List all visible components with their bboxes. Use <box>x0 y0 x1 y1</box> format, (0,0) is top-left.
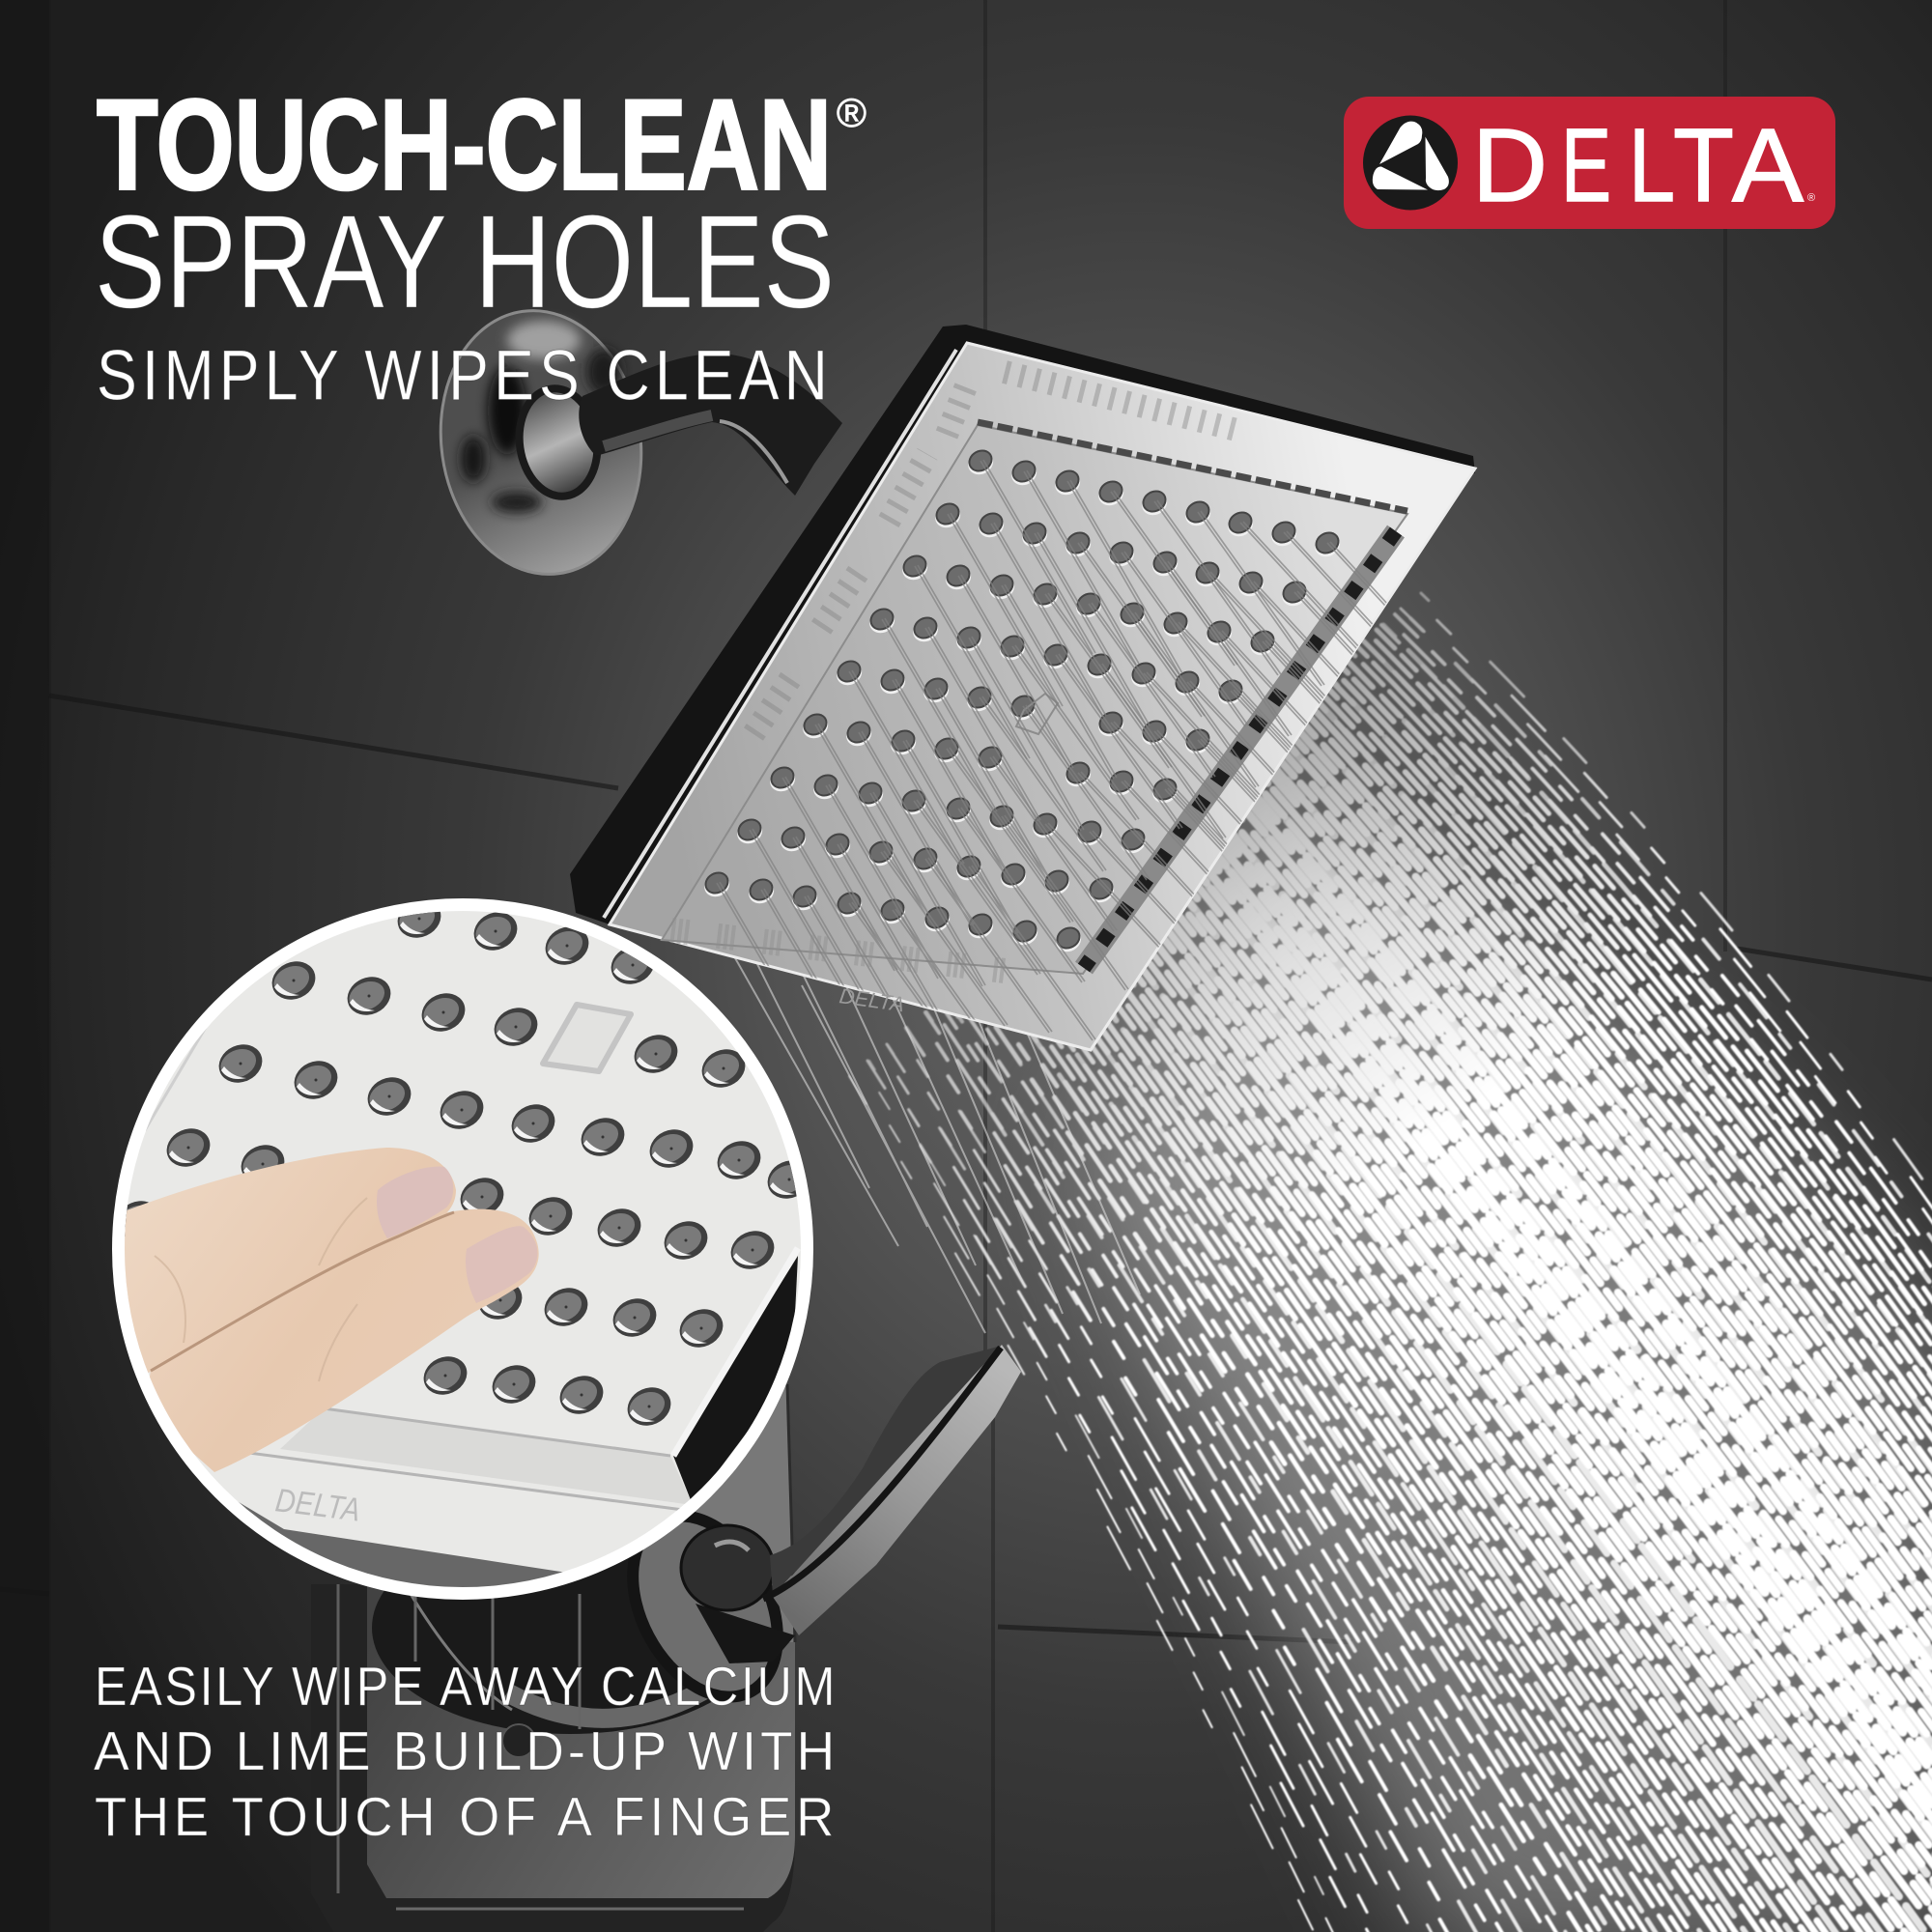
subheading: Simply wipes clean: SIMPLY WIPES CLEAN <box>97 336 833 415</box>
shower valve trim plate and lever handle <box>311 1345 1021 1932</box>
thin water jets below the head <box>717 883 1140 1333</box>
wordmark <box>1472 106 1804 223</box>
body text: description: THE TOUCH OF A FINGER <box>95 1786 838 1848</box>
wordmark: T <box>1673 106 1734 223</box>
wordmark: L <box>1629 106 1675 223</box>
heading: Spray Holes: SPRAY HOLES <box>95 188 835 336</box>
base streak layer <box>849 609 1932 1932</box>
flange <box>424 298 658 587</box>
upper fingernail <box>377 1166 453 1238</box>
registered mark: ® <box>1807 192 1815 204</box>
hub ring <box>604 1492 807 1721</box>
third spray layer <box>863 598 1932 1932</box>
water lines across the face <box>717 460 1387 1041</box>
upper finger <box>97 1148 456 1391</box>
panel top wall <box>978 422 1407 511</box>
second spray layer <box>856 603 1932 1932</box>
spray streaks <box>849 593 1932 1932</box>
logo badge <box>543 1005 631 1071</box>
chrome face close-up <box>112 898 813 1600</box>
rain shower head <box>570 325 1475 1090</box>
small logo mark on panel <box>1016 694 1058 734</box>
lever top face <box>770 1346 1001 1596</box>
title: Touch-Clean: TOUCH-CLEAN <box>97 73 832 216</box>
icon: delta emblem <box>1363 116 1458 211</box>
registered mark: ® <box>837 90 867 135</box>
body text: description: EASILY WIPE AWAY CALCIUM <box>95 1656 838 1718</box>
body text: description <box>94 1656 838 1848</box>
inset spray holes <box>110 893 817 1433</box>
lower finger <box>145 1209 539 1472</box>
hub base <box>696 1604 795 1663</box>
white ring <box>112 898 813 1600</box>
water spray <box>717 593 1932 1932</box>
bright water line edges <box>719 460 1387 1039</box>
logo: Delta <box>1344 97 1835 229</box>
mottled reflection on rim <box>753 372 1236 734</box>
hub ball <box>681 1525 774 1610</box>
grey water line shadows <box>717 460 1387 1041</box>
arm <box>579 354 842 496</box>
arm base ring <box>513 384 604 501</box>
wordmark: E <box>1561 106 1611 223</box>
arm lower reflection <box>604 415 712 446</box>
wall seen at bottom <box>238 1501 563 1587</box>
callout: inset close-up circle <box>97 893 817 1642</box>
flange reflections <box>461 321 621 513</box>
recessed spray panel <box>662 425 1407 974</box>
crease between fingers <box>151 1212 454 1371</box>
wordmark: A <box>1732 106 1804 223</box>
lever light face <box>773 1345 1021 1635</box>
screw <box>502 1724 535 1757</box>
DELTA engraving on head: DELTA <box>838 983 906 1016</box>
valve body <box>372 1521 768 1734</box>
spray pattern band on bottom of panel <box>671 930 1005 971</box>
dark reflections in wall <box>1084 531 1396 968</box>
lower fingernail <box>466 1226 537 1303</box>
fourth spray layer <box>869 593 1932 1932</box>
dark side of head <box>673 1256 798 1505</box>
shower arm and wall flange <box>424 298 842 587</box>
DELTA engraving: DELTA <box>273 1482 362 1529</box>
body text: description: AND LIME BUILD-UP WITH <box>94 1720 838 1782</box>
panel reflective wall <box>1084 531 1396 968</box>
spray holes grid <box>700 445 1345 956</box>
wordmark: D <box>1472 106 1548 223</box>
plate upper right chrome <box>618 1384 795 1642</box>
black side face <box>570 325 1475 927</box>
lower rim of face <box>280 1408 693 1505</box>
chrome outer face <box>610 343 1475 1050</box>
trim plate <box>311 1584 795 1932</box>
soft brightness of the spray <box>1082 831 1932 1932</box>
